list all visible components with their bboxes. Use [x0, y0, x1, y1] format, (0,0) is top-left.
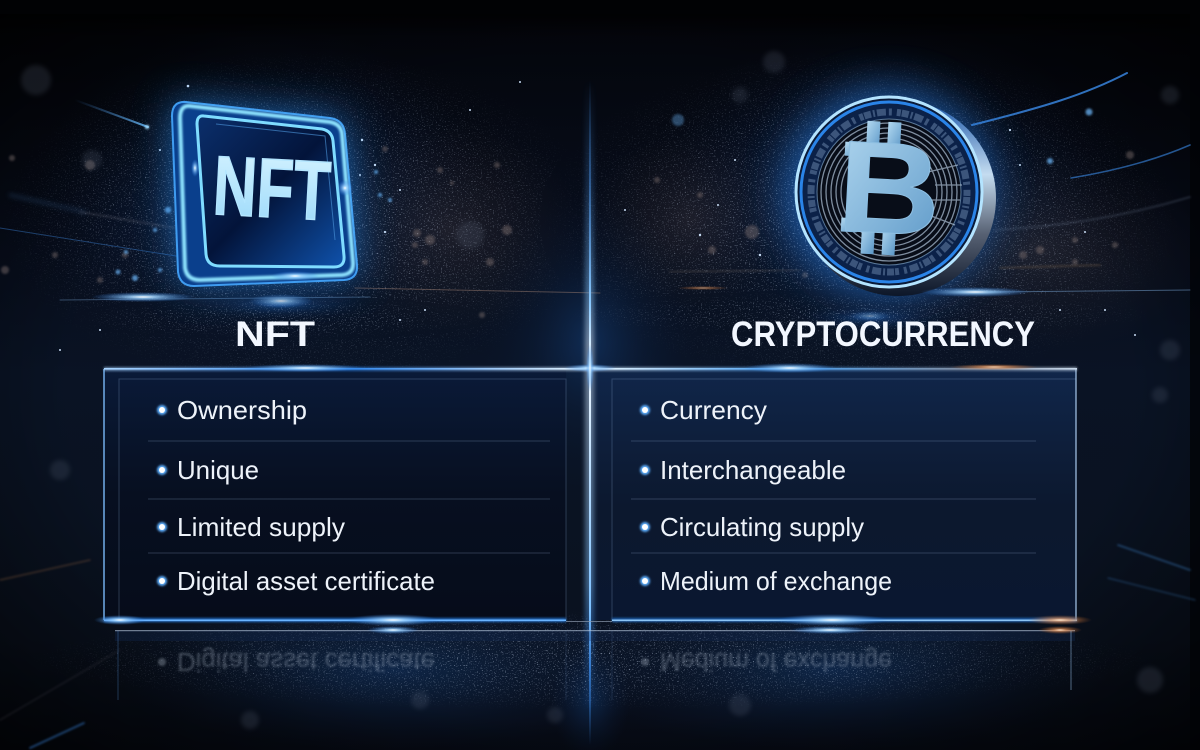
list: NFT traits: Digital asset certificate [177, 566, 435, 596]
panel: Cryptocurrency list box [591, 369, 1076, 620]
list: Cryptocurrency traits: Interchangeable [660, 455, 846, 485]
reflection: last list row, NFT: Digital asset certificate [177, 647, 435, 677]
list: NFT traits: Limited supply [177, 512, 345, 542]
coin symbol letter: B [834, 112, 945, 264]
icon: NFT glowing tile [172, 102, 357, 286]
list: Cryptocurrency traits: Circulating supply [660, 512, 864, 542]
reflection: last list row, Cryptocurrency: Medium of exchange [660, 647, 892, 677]
list: Cryptocurrency traits: Currency [660, 395, 767, 425]
heading: Cryptocurrency: CRYPTOCURRENCY [731, 315, 1035, 354]
horizon glow [91, 286, 1030, 321]
frame light rails [94, 344, 1092, 641]
centre vertical divider [585, 80, 594, 745]
frame reflections [118, 631, 1071, 700]
icon: Bitcoin coin [782, 86, 996, 298]
list: Cryptocurrency traits [640, 395, 892, 596]
list: NFT traits: Ownership [177, 395, 307, 425]
list: NFT traits: Unique [177, 455, 259, 485]
panel: NFT list box [104, 369, 566, 620]
NFT icon lettering: NFT [211, 138, 333, 238]
heading: NFT: NFT [235, 315, 315, 354]
list: NFT traits [157, 395, 435, 596]
list: Cryptocurrency traits: Medium of exchange [660, 566, 892, 596]
